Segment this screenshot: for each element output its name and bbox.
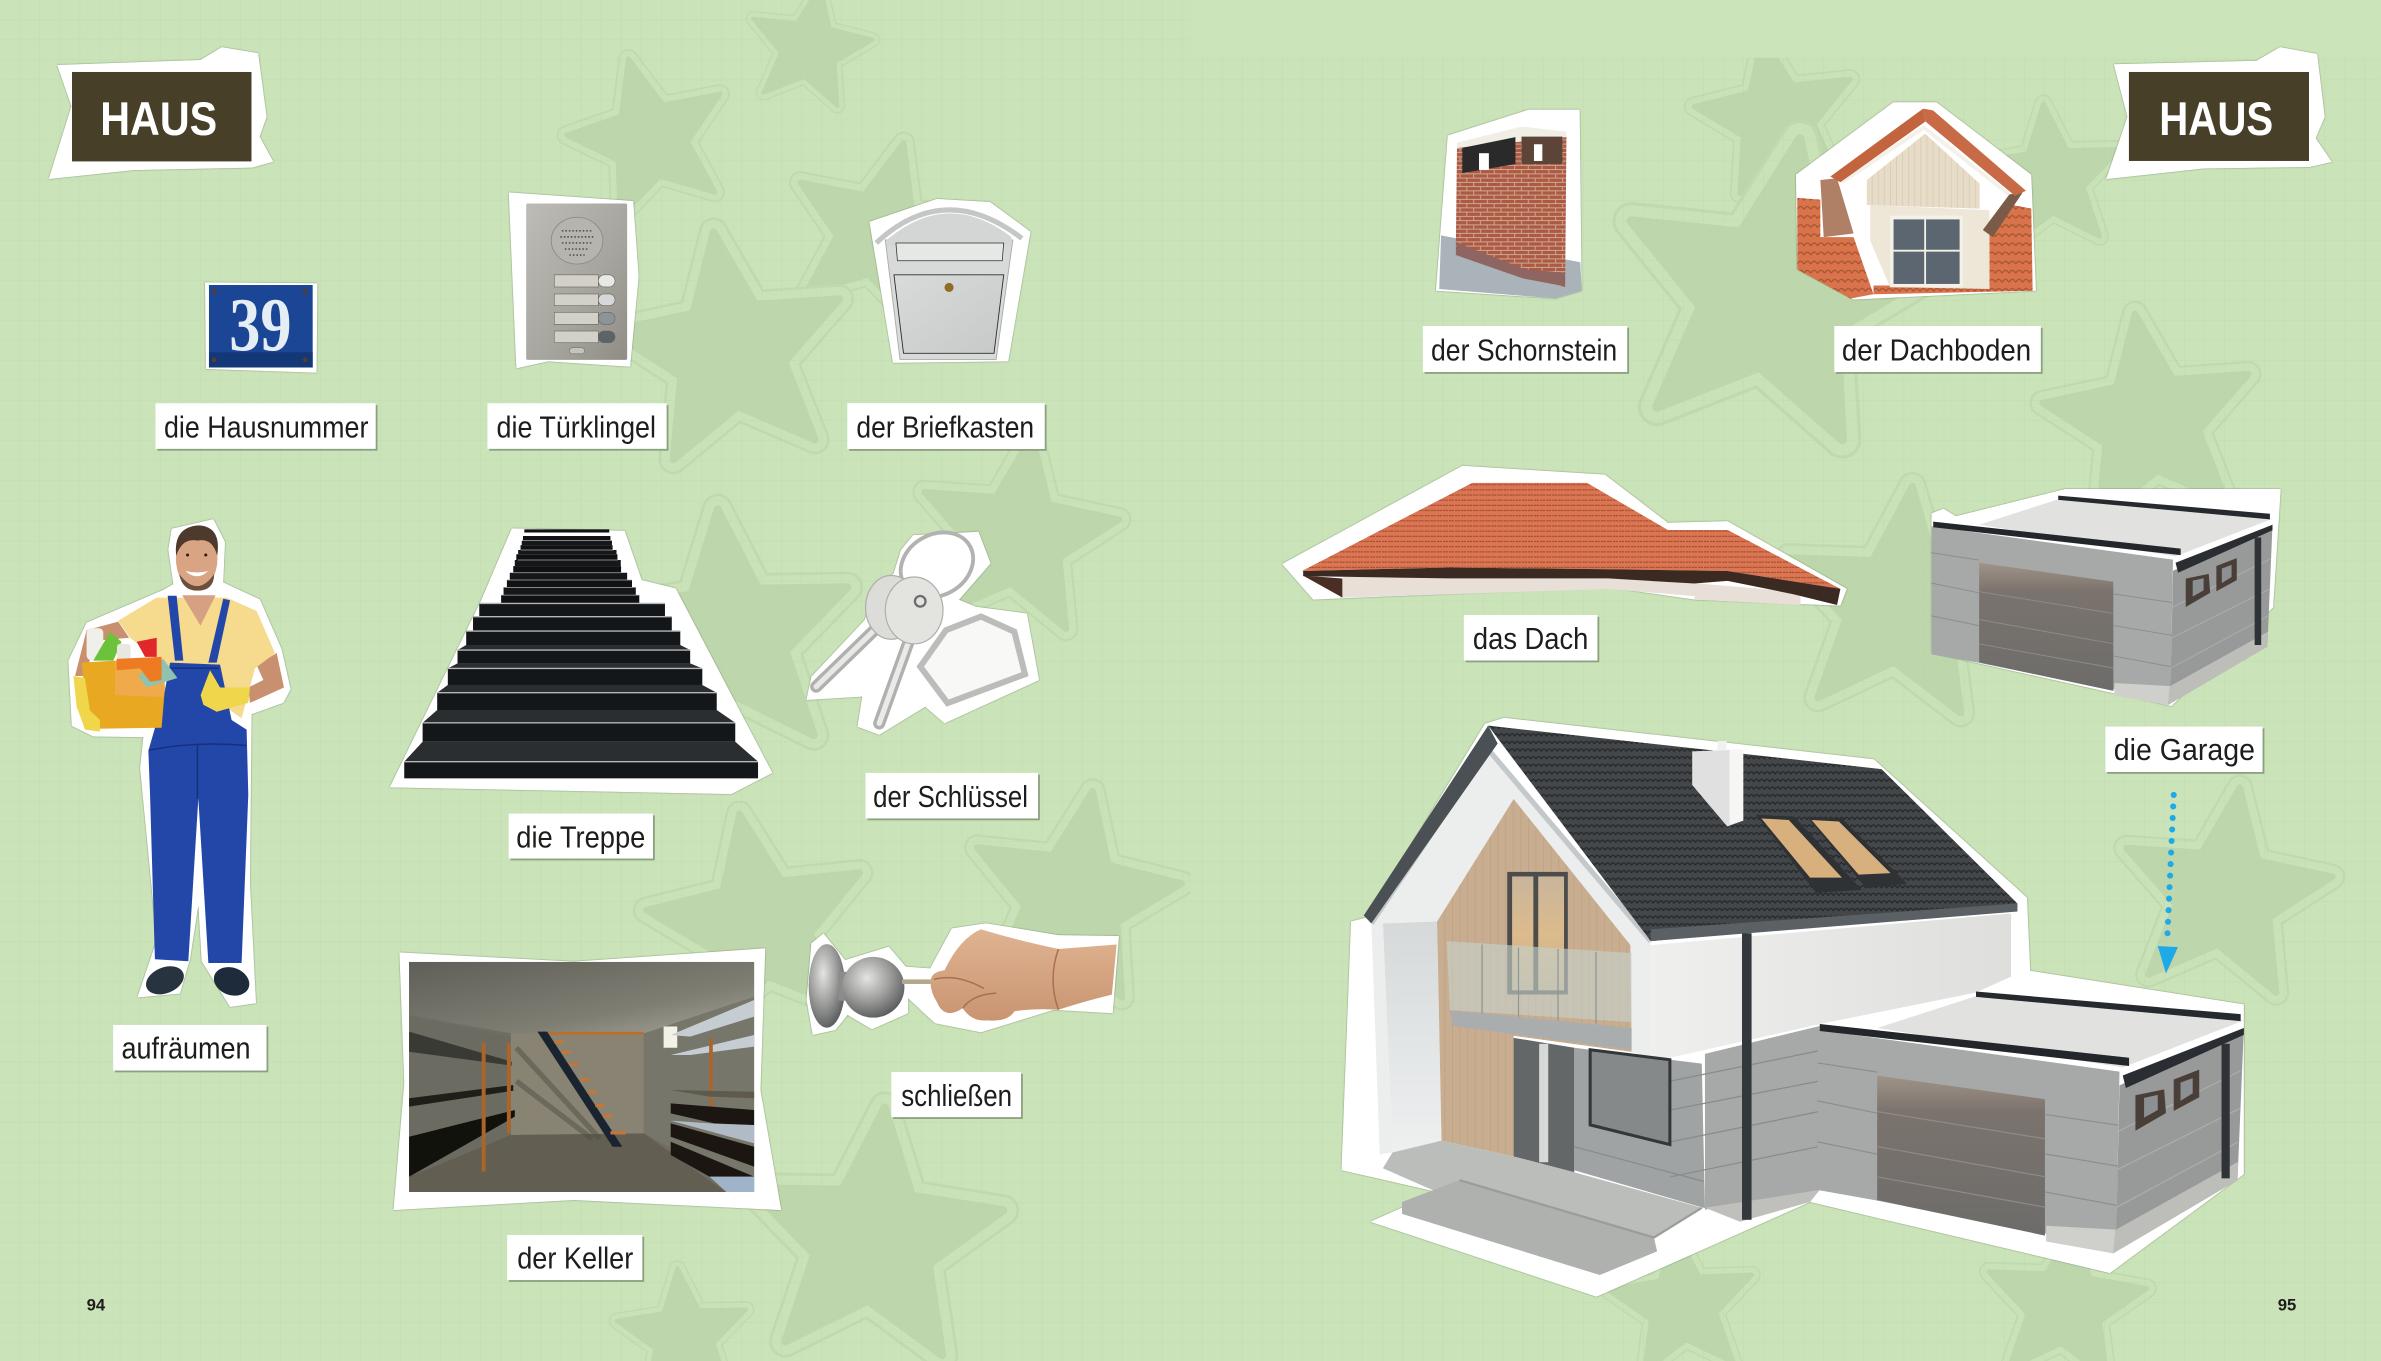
- house: ground floor window: [1590, 1050, 1670, 1145]
- label: schließen: [891, 1072, 1023, 1119]
- heading tag: HAUS right: [2106, 47, 2332, 179]
- icon: hand turning key in door knob: [806, 923, 1119, 1035]
- label: die Treppe: [509, 814, 655, 860]
- arrow: blue dotted to garage: [2158, 795, 2178, 973]
- stairs: lower flight: [404, 603, 758, 778]
- label: die Hausnummer: die Hausnummer: [164, 411, 368, 444]
- icon: house with garage: [1341, 718, 2244, 1297]
- house: roof: [1364, 726, 2017, 941]
- man: overalls: [148, 596, 248, 963]
- label: der Schlüssel: [866, 773, 1040, 820]
- house: gable frame: [1371, 749, 1651, 1154]
- label: die Treppe: die Treppe: [516, 821, 645, 854]
- door knob: [809, 944, 931, 1028]
- label: der Keller: der Keller: [517, 1243, 633, 1276]
- house: lower cladding walls: [1573, 1026, 1820, 1222]
- stairs: upper flight: [501, 529, 639, 603]
- heading tag: HAUS left: HAUS: [100, 92, 217, 145]
- label: schließen: schließen: [901, 1080, 1012, 1113]
- hand: [931, 929, 1117, 1021]
- dormer: roof tiles: [1797, 198, 2033, 299]
- label: der Dachboden: [1834, 326, 2043, 374]
- house: upper window: [1507, 872, 1568, 994]
- heading tag: HAUS right: HAUS: [2159, 92, 2273, 145]
- label: die Garage: die Garage: [2114, 734, 2255, 767]
- dormer: window: [1890, 216, 1963, 287]
- man: arms: [75, 622, 284, 703]
- house: skylights: [1756, 815, 1907, 893]
- cellar: left shelves: [409, 1032, 515, 1177]
- house: garage: [1818, 992, 2244, 1253]
- label: der Dachboden: der Dachboden: [1842, 335, 2031, 368]
- label: der Keller: [507, 1235, 644, 1282]
- man: yellow gloves: [73, 670, 250, 732]
- page number 94: 94: [87, 1295, 106, 1314]
- icon: key bunch: [806, 520, 1039, 735]
- heading tag: HAUS left: [49, 47, 273, 179]
- label: die Hausnummer: [156, 403, 378, 451]
- label: der Briefkasten: [847, 403, 1047, 451]
- page number 95: 95: [2278, 1295, 2296, 1314]
- cellar: steep stairs: [537, 1032, 626, 1147]
- label: das Dach: [1464, 615, 1599, 662]
- man: head: [176, 525, 218, 591]
- icon: cellar photo: [393, 948, 781, 1210]
- icon: letter box: [869, 199, 1031, 363]
- icon: man with cleaning box: [68, 519, 291, 1007]
- label: der Schornstein: [1423, 326, 1629, 374]
- label: aufräumen: aufräumen: [122, 1032, 251, 1065]
- house: downpipe: [1742, 933, 1752, 1220]
- icon: dormer attic: [1796, 102, 2036, 300]
- icon: stairs: [390, 528, 772, 794]
- icon: house number plate: 39: [229, 284, 292, 368]
- label: die Türklingel: die Türklingel: [497, 411, 656, 444]
- label: das Dach: das Dach: [1473, 623, 1588, 656]
- key fob house: [920, 616, 1025, 703]
- icon: garage: [1932, 489, 2281, 706]
- house: side recess wall: [1383, 921, 1442, 1153]
- house: balcony: [1447, 941, 1632, 1050]
- cellar: right shelves: [671, 1000, 754, 1192]
- house: entrance steps: [1383, 1141, 1702, 1275]
- house: front door: [1514, 1038, 1574, 1172]
- icon: door bell panel: [509, 192, 639, 368]
- label: der Schlüssel: der Schlüssel: [873, 781, 1028, 814]
- label: der Schornstein: der Schornstein: [1431, 335, 1617, 368]
- label: die Garage: [2105, 727, 2264, 774]
- icon: roof: [1282, 466, 1847, 606]
- label: aufräumen: [113, 1025, 268, 1072]
- door bell buttons: [554, 275, 615, 343]
- key ring: [889, 520, 985, 610]
- label: der Briefkasten: der Briefkasten: [856, 411, 1034, 444]
- icon: chimney: [1436, 110, 1582, 299]
- label: die Türklingel: [487, 403, 668, 451]
- house: chimney: [1692, 741, 1743, 827]
- house: white upper wall: [1651, 914, 2011, 1058]
- house: wooden wall: [1437, 799, 1632, 1156]
- keys: [816, 575, 943, 723]
- man: yellow box with cleaning items: [82, 628, 177, 729]
- icon: house number plate: [205, 282, 317, 373]
